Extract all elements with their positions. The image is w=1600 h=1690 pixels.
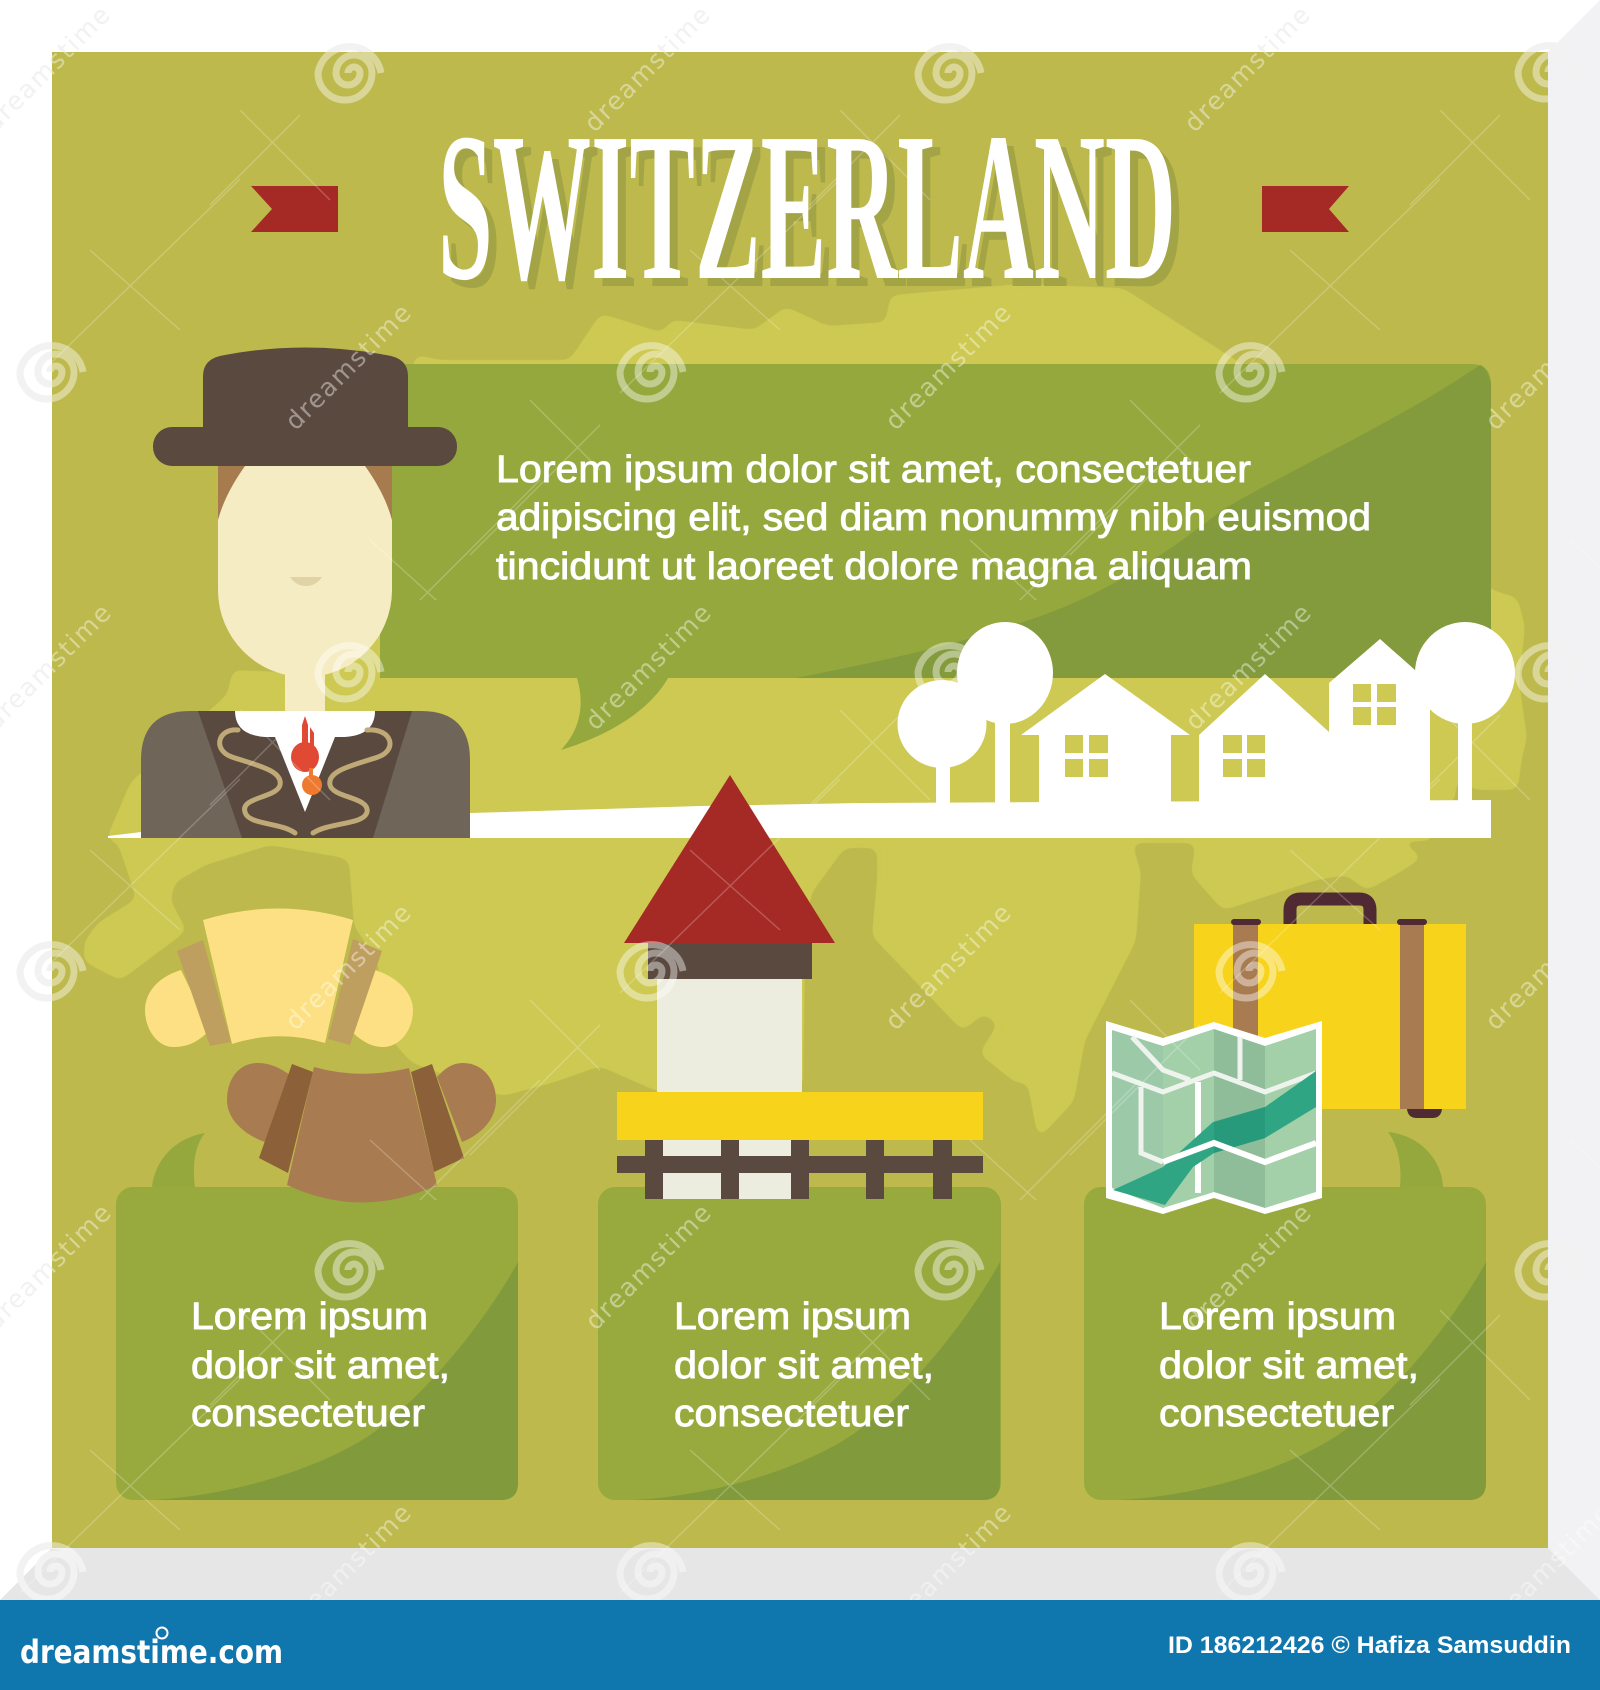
bubble tail xyxy=(561,678,668,750)
watermark text: dreamstime xyxy=(879,1498,1017,1636)
map fold xyxy=(1163,1143,1316,1162)
gold trim xyxy=(220,730,390,833)
bubble text: adipiscing elit, sed diam nonummy nibh euismod xyxy=(496,497,1371,539)
bottom text middle: Lorem ipsum xyxy=(674,1296,911,1338)
bottom text left: consectetuer xyxy=(191,1393,425,1435)
bottom text middle xyxy=(674,1296,934,1435)
white road and village xyxy=(108,622,1515,838)
map river xyxy=(1113,1071,1316,1205)
watermark marks on the white margins: dreamstime xyxy=(1178,0,1316,138)
hat xyxy=(153,348,457,466)
bottom text middle: consectetuer xyxy=(674,1393,909,1435)
icon: lake tower xyxy=(617,775,983,1199)
watermark marks on the white margins: dreamstime xyxy=(578,0,716,138)
watermark text: dreamstime xyxy=(1179,1198,1317,1336)
house windows xyxy=(1065,684,1396,777)
bottom text left: Lorem ipsum xyxy=(191,1296,428,1338)
watermark text: dreamstime xyxy=(879,898,1017,1036)
footer credit: ID 186212426 © Hafiza Samsuddin xyxy=(1168,1632,1571,1659)
footer logo: dreamstime.com xyxy=(20,1633,283,1671)
icon: yellow croissant xyxy=(145,908,413,1047)
panel: bottom left xyxy=(116,1133,518,1500)
watermark text: dreamstime xyxy=(579,598,717,736)
watermark text: dreamstime xyxy=(879,298,1017,436)
jacket xyxy=(141,711,470,838)
vest xyxy=(198,711,412,838)
ribbon left xyxy=(251,186,338,232)
bottom text left: dolor sit amet, xyxy=(191,1345,450,1387)
person in Swiss costume xyxy=(141,348,470,838)
panel: main speech bubble xyxy=(380,364,1491,750)
bottom text middle: dolor sit amet, xyxy=(674,1345,934,1387)
neck tie xyxy=(291,716,322,795)
bottom text right: dolor sit amet, xyxy=(1159,1345,1419,1387)
watermark text: dreamstime xyxy=(1179,598,1317,736)
bottom text right: consectetuer xyxy=(1159,1393,1394,1435)
bottom text left xyxy=(191,1296,450,1435)
watermark text: dreamstime xyxy=(279,898,417,1036)
tower deck xyxy=(617,1092,983,1140)
mouth xyxy=(290,577,322,586)
bottom text right xyxy=(1159,1296,1419,1435)
tower wall xyxy=(657,979,802,1092)
tower roof xyxy=(624,775,835,943)
title xyxy=(438,89,1184,332)
neck xyxy=(285,640,325,714)
hair xyxy=(218,466,392,522)
bubble text: tincidunt ut laoreet dolore magna aliquam xyxy=(496,546,1252,588)
panel: bottom middle xyxy=(598,1187,1001,1500)
watermark text: dreamstime xyxy=(578,0,716,138)
map of Switzerland silhouette xyxy=(87,287,1524,1133)
watermark text: dreamstime xyxy=(579,1198,717,1336)
icon: folded map xyxy=(1106,1021,1322,1214)
watermark text: dreamstime xyxy=(279,1498,417,1636)
footer bar xyxy=(0,1600,1600,1690)
panel: bottom right xyxy=(1084,1132,1486,1500)
watermark text: dreamstime xyxy=(1178,0,1316,138)
collar xyxy=(235,711,375,812)
watermark text: dreamstime xyxy=(279,298,417,436)
icon: brown croissant xyxy=(227,1063,496,1202)
icon: suitcase xyxy=(1194,899,1466,1118)
bubble text xyxy=(496,449,1371,588)
face xyxy=(218,466,392,677)
fence xyxy=(617,1140,983,1199)
bubble text: Lorem ipsum dolor sit amet, consectetuer xyxy=(496,449,1251,491)
houses xyxy=(1021,639,1430,805)
trees xyxy=(898,622,1515,805)
bottom text right: Lorem ipsum xyxy=(1159,1296,1396,1338)
tower band xyxy=(648,943,812,979)
tower base xyxy=(663,1140,791,1199)
map roads xyxy=(1112,1037,1316,1193)
ribbon right xyxy=(1262,186,1349,232)
